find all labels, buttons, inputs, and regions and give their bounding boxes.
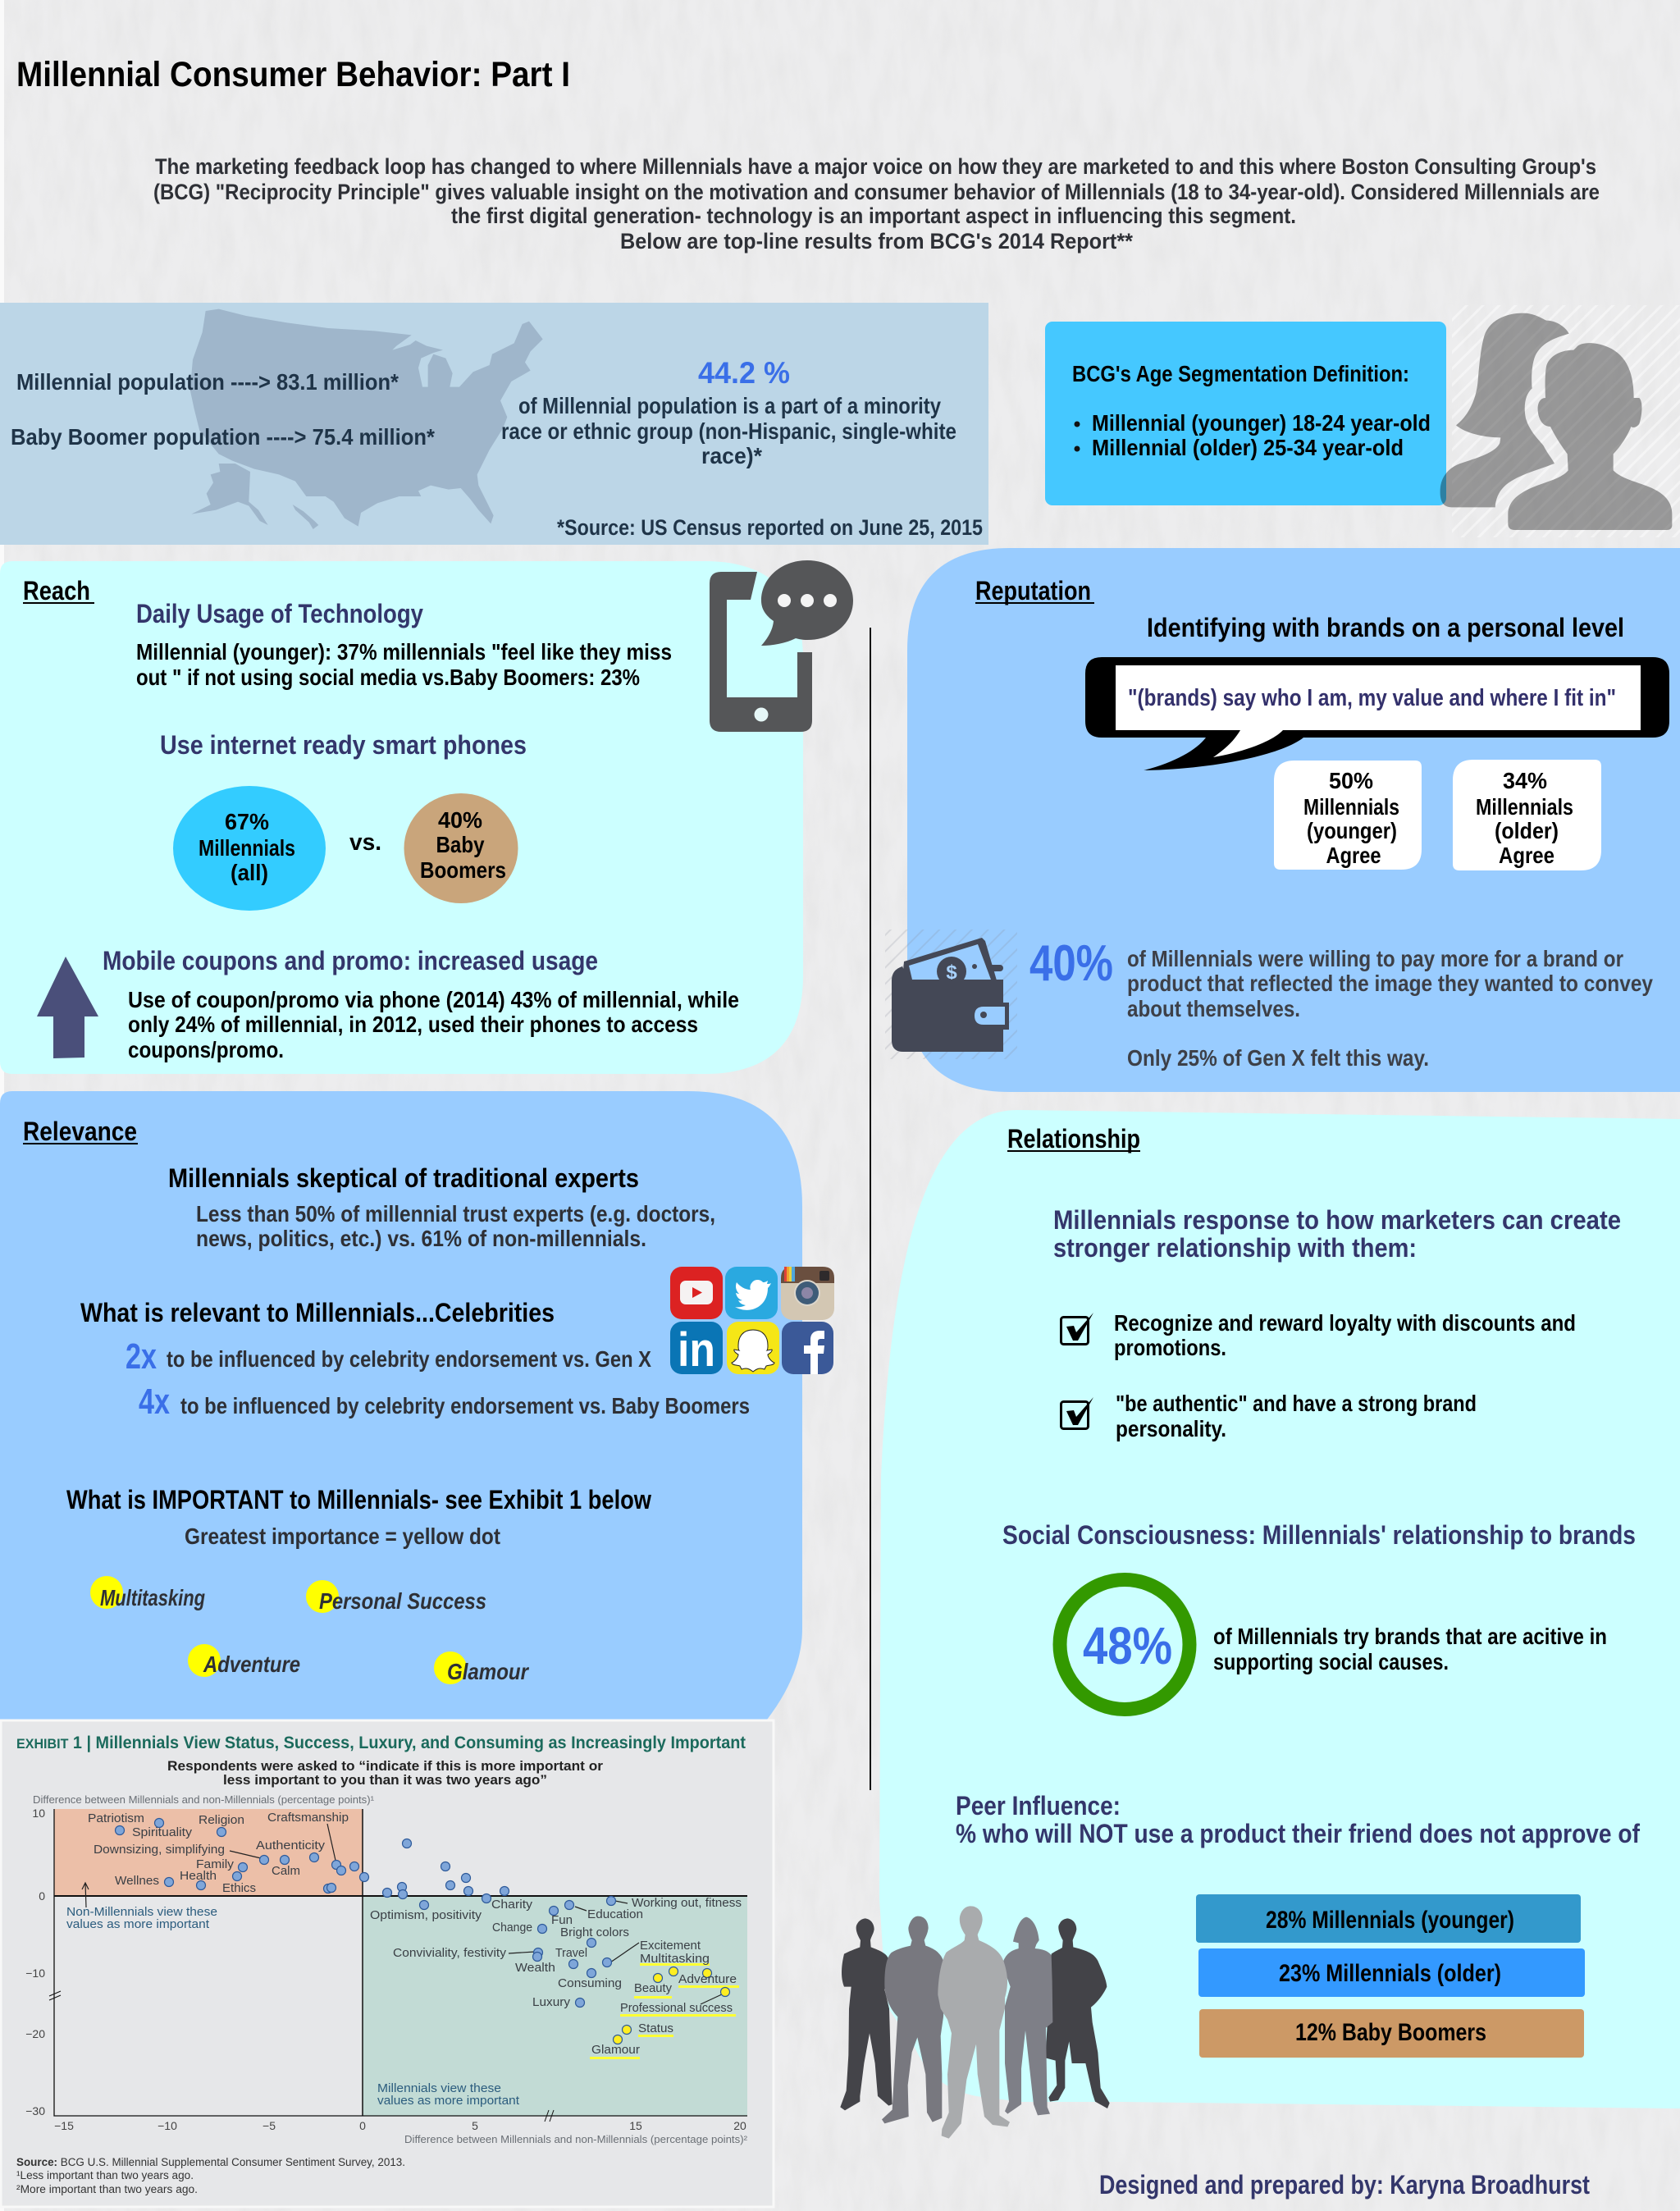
yellow data points	[614, 1967, 730, 2044]
exhibit subtitle: less important to you than it was two years ago”	[223, 1772, 547, 1788]
leader lines	[82, 1824, 724, 2004]
mobile coupons text: coupons/promo.	[128, 1037, 284, 1062]
versus label: vs.	[349, 829, 381, 856]
icon: wallet: $	[946, 962, 957, 984]
ring: 48%: 48%	[1083, 1616, 1172, 1675]
circle: millennials 67%: (all)	[231, 860, 268, 885]
icon: linkedin: in	[678, 1323, 715, 1377]
icon: youtube	[670, 1267, 723, 1319]
stat: 40%: 40%	[1029, 935, 1113, 992]
agree card: older 34%	[1453, 760, 1601, 870]
agree card: older 34%: Millennials	[1476, 794, 1573, 820]
bar: 12% baby boomers	[1199, 2009, 1584, 2058]
speech bubble quote	[1085, 657, 1669, 770]
vertical divider	[870, 628, 871, 1790]
minority description: race)*	[701, 443, 762, 468]
silhouettes: group of people	[840, 1906, 1110, 2139]
social causes text: supporting social causes.	[1213, 1649, 1449, 1674]
marketers heading: stronger relationship with them:	[1053, 1233, 1417, 1263]
map of the United States	[190, 309, 543, 529]
axis tick labels	[25, 1807, 746, 2132]
panel: age segmentation	[1045, 322, 1446, 505]
willing to pay text	[1127, 946, 1653, 1071]
stat: 2x: 2x	[126, 1336, 157, 1377]
note: non-millennials: Non-Millennials view these	[66, 1906, 217, 1919]
circle: baby boomers 40%: 40%	[438, 807, 482, 833]
reputation heading: Reputation	[975, 576, 1091, 605]
item: adventure	[188, 1644, 300, 1677]
data point labels: Consuming	[558, 1977, 622, 1990]
axis tick labels: 0	[359, 2119, 366, 2132]
axis tick labels: −5	[262, 2119, 276, 2132]
data point labels: Excitement	[640, 1939, 701, 1953]
loyalty text: Recognize and reward loyalty with discounts and	[1114, 1310, 1576, 1336]
circle: baby boomers 40%	[404, 793, 518, 903]
icon: two people	[1440, 305, 1680, 537]
willing to pay text: about themselves.	[1127, 996, 1300, 1021]
data point labels: Bright colors	[560, 1926, 629, 1939]
data point labels	[88, 1811, 742, 2057]
stat: 2x	[126, 1336, 651, 1377]
social causes text: of Millennials try brands that are acitive in	[1213, 1624, 1607, 1649]
note: millennials: Millennials view these	[377, 2082, 501, 2095]
identifying heading: Identifying with brands on a personal level	[1147, 613, 1624, 642]
panel: exhibit 1 chart	[1, 1720, 774, 2207]
icon: up arrow	[37, 957, 98, 1058]
smart phones heading: Use internet ready smart phones	[160, 730, 527, 760]
relationship heading: Relationship	[1007, 1124, 1140, 1153]
source note: *Source: US Census reported on June 25, 2015	[557, 515, 983, 540]
agree card: younger 50%: Millennials	[1303, 794, 1399, 820]
data point labels: Change	[492, 1921, 532, 1935]
age segment list: Millennial (younger) 18-24 year-old	[1092, 410, 1431, 436]
item: multitasking: Multitasking	[100, 1585, 205, 1610]
axis tick labels: −20	[25, 2027, 45, 2040]
data point labels: Wellnes	[115, 1875, 159, 1888]
item: glamour	[434, 1651, 530, 1684]
agree card: older 34%: 34%	[1503, 768, 1547, 793]
data point labels: Multitasking	[640, 1953, 710, 1966]
axis tick labels: 15	[629, 2119, 642, 2132]
data point labels: Fun	[551, 1914, 573, 1927]
data point labels: Conviviality, festivity	[393, 1947, 507, 1960]
exhibit source notes: Source: BCG U.S. Millennial Supplemental Consumer Sentiment Survey, 2013.	[16, 2156, 405, 2168]
data point labels: Optimism, positivity	[370, 1909, 482, 1922]
skeptical heading: Millennials skeptical of traditional experts	[168, 1163, 639, 1193]
data point labels: Health	[180, 1870, 217, 1883]
data point labels: Family	[196, 1858, 235, 1871]
x axis title: Difference between Millennials and non-Millennials (percentage points)²	[404, 2134, 747, 2145]
axis tick labels: −15	[54, 2119, 74, 2132]
y axis title: Difference between Millennials and non-Millennials (percentage points)¹	[33, 1794, 374, 1806]
exhibit subtitle	[167, 1758, 603, 1788]
data point labels: Spirituality	[132, 1826, 193, 1839]
data point labels: Religion	[199, 1814, 244, 1827]
data point labels: Charity	[491, 1898, 533, 1912]
data point labels: Travel	[555, 1947, 587, 1960]
baby boomer population: Baby Boomer population ----> 75.4 million*	[11, 424, 435, 450]
note: millennials	[377, 2082, 519, 2108]
highlighted label underlines	[590, 1963, 739, 2059]
note: non-millennials	[66, 1906, 217, 1931]
icon: phone with chat bubble	[710, 560, 853, 732]
item: multitasking	[90, 1576, 205, 1610]
authentic text: "be authentic" and have a strong brand	[1116, 1391, 1477, 1416]
icon: facebook	[782, 1322, 833, 1374]
data point labels: Adventure	[678, 1973, 737, 1986]
bar: 12% baby boomers: 12% Baby Boomers	[1295, 2019, 1486, 2046]
item: personal success: Personal Success	[319, 1588, 486, 1614]
age segment list	[1075, 410, 1431, 460]
mobile coupons text: only 24% of millennial, in 2012, used their phones to access	[128, 1012, 698, 1037]
mobile coupons text	[128, 987, 739, 1062]
agree card: older 34%: (older)	[1495, 818, 1559, 843]
ring: 48%	[1060, 1580, 1189, 1710]
intro text: Below are top-line results from BCG's 2014 Report**	[620, 229, 1133, 254]
chart axes	[49, 1809, 747, 2122]
bar: 28% millennials younger: 28% Millennials (younger)	[1266, 1907, 1514, 1934]
daily usage text	[136, 639, 672, 690]
minority description	[501, 393, 956, 468]
agree card: younger 50%: Agree	[1326, 843, 1381, 868]
blue data points	[115, 1818, 615, 2007]
data point labels: Status	[638, 2022, 673, 2035]
stat: 2x: to be influenced by celebrity endorsement vs. Gen X	[167, 1346, 651, 1372]
marketers heading: Millennials response to how marketers can create	[1053, 1205, 1621, 1235]
exhibit source notes	[16, 2156, 405, 2195]
circle: baby boomers 40%: Baby	[436, 832, 485, 857]
data point labels: Downsizing, simplifying	[94, 1843, 225, 1857]
quadrant: millennials	[363, 1896, 747, 2116]
mobile coupons text: Use of coupon/promo via phone (2014) 43% of millennial, while	[128, 987, 739, 1012]
exhibit title: EXHIBIT 1 | Millennials View Status, Success, Luxury, and Consuming as Increasingly Important	[16, 1734, 746, 1752]
data point labels: Wealth	[515, 1962, 555, 1975]
age segmentation heading: BCG's Age Segmentation Definition:	[1072, 361, 1409, 386]
data point labels: Education	[587, 1908, 643, 1921]
authentic text	[1116, 1391, 1477, 1441]
bar: 23% millennials older: 23% Millennials (older)	[1279, 1960, 1501, 1987]
daily usage text: out " if not using social media vs.Baby Boomers: 23%	[136, 665, 640, 690]
reach heading: Reach	[23, 576, 90, 605]
circle: millennials 67%: Millennials	[199, 835, 295, 861]
intro text: the first digital generation- technology is an important aspect in influencing this segment.	[451, 203, 1296, 228]
data point labels: Ethics	[222, 1882, 256, 1895]
axis tick labels: −10	[158, 2119, 177, 2132]
agree card: younger 50%: (younger)	[1307, 818, 1397, 843]
yellow dot legend: Greatest importance = yellow dot	[185, 1523, 500, 1549]
bar: 28% millennials younger	[1196, 1894, 1581, 1943]
title: Millennial Consumer Behavior: Part I	[16, 55, 570, 94]
item: glamour: Glamour	[447, 1659, 530, 1684]
axis tick labels: 10	[32, 1807, 45, 1820]
skeptical text: news, politics, etc.) vs. 61% of non-millennials.	[196, 1226, 646, 1251]
agree card: younger 50%	[1274, 761, 1422, 870]
circle: millennials 67%	[173, 786, 326, 911]
loyalty text	[1114, 1310, 1576, 1360]
icon: instagram	[781, 1267, 834, 1320]
skeptical text: Less than 50% of millennial trust experts (e.g. doctors,	[196, 1201, 715, 1227]
agree card: older 34%: Agree	[1499, 843, 1554, 868]
data point labels: Patriotism	[88, 1812, 144, 1825]
stat: 4x	[139, 1382, 750, 1422]
peer influence heading	[956, 1791, 1640, 1848]
mobile coupons heading: Mobile coupons and promo: increased usage	[103, 946, 598, 975]
icon: wallet	[885, 930, 1017, 1059]
exhibit source notes: ²More important than two years ago.	[16, 2183, 198, 2195]
axis tick labels: 0	[39, 1889, 45, 1903]
willing to pay text: Only 25% of Gen X felt this way.	[1127, 1045, 1429, 1071]
data point labels: Working out, fitness	[632, 1897, 742, 1910]
icon: twitter	[725, 1267, 778, 1319]
panel: population	[0, 303, 988, 545]
axis tick labels: −30	[25, 2104, 45, 2117]
item: adventure: Adventure	[203, 1651, 300, 1677]
important heading: What is IMPORTANT to Millennials- see Exhibit 1 below	[66, 1485, 651, 1514]
data point labels: Calm	[272, 1865, 300, 1878]
data point labels: Professional success	[620, 2002, 733, 2015]
agree card: younger 50%: 50%	[1329, 768, 1373, 793]
millennial population: Millennial population ----> 83.1 million*	[16, 369, 399, 395]
note: non-millennials: values as more important	[66, 1918, 209, 1931]
stat: 4x: to be influenced by celebrity endorsement vs. Baby Boomers	[180, 1393, 750, 1418]
icon: snapchat	[727, 1322, 779, 1374]
marketers heading	[1053, 1205, 1621, 1263]
bar: 23% millennials older	[1198, 1948, 1585, 1997]
loyalty text: promotions.	[1114, 1335, 1226, 1360]
stat: 44.2%: 44.2 %	[698, 356, 790, 390]
daily usage text: Millennial (younger): 37% millennials "feel like they miss	[136, 639, 672, 665]
circle: baby boomers 40%: Boomers	[420, 857, 506, 883]
axis tick labels: 20	[733, 2119, 746, 2132]
data point labels: Beauty	[634, 1982, 673, 1995]
intro text	[153, 154, 1600, 254]
stat: 4x: 4x	[139, 1382, 170, 1422]
age segment list: Millennial (older) 25-34 year-old	[1092, 435, 1404, 460]
minority description: race or ethnic group (non-Hispanic, single-white	[501, 418, 956, 444]
item: personal success	[306, 1580, 486, 1614]
icon: checkbox 2	[1061, 1397, 1093, 1429]
relevance heading: Relevance	[23, 1117, 137, 1146]
data point labels: Authenticity	[256, 1839, 326, 1852]
axis tick labels: −10	[25, 1967, 45, 1980]
authentic text: personality.	[1116, 1416, 1226, 1441]
celebrities heading: What is relevant to Millennials...Celebrities	[80, 1298, 555, 1327]
panel: relationship	[879, 1110, 1680, 2108]
peer influence heading: Peer Influence:	[956, 1791, 1121, 1820]
minority description: of Millennial population is a part of a minority	[518, 393, 941, 418]
panel: relevance	[0, 1091, 834, 1720]
exhibit subtitle: Respondents were asked to “indicate if this is more important or	[167, 1758, 603, 1774]
social causes text	[1213, 1624, 1607, 1674]
note: millennials: values as more important	[377, 2095, 519, 2108]
axis tick labels: 5	[472, 2119, 478, 2132]
data point labels: Craftsmanship	[267, 1811, 349, 1825]
icon: checkbox 1	[1061, 1313, 1093, 1344]
data point labels: Luxury	[532, 1996, 571, 2009]
credit line: Designed and prepared by: Karyna Broadhurst	[1099, 2170, 1590, 2200]
exhibit source notes: ¹Less important than two years ago.	[16, 2169, 194, 2181]
skeptical text	[196, 1201, 715, 1251]
data point labels: Glamour	[591, 2044, 640, 2057]
circle: millennials 67%: 67%	[225, 809, 269, 834]
panel: reach	[0, 560, 853, 1074]
daily usage heading: Daily Usage of Technology	[136, 599, 423, 628]
panel: reputation	[885, 548, 1680, 1092]
quadrant: non-millennials	[54, 1809, 363, 1896]
